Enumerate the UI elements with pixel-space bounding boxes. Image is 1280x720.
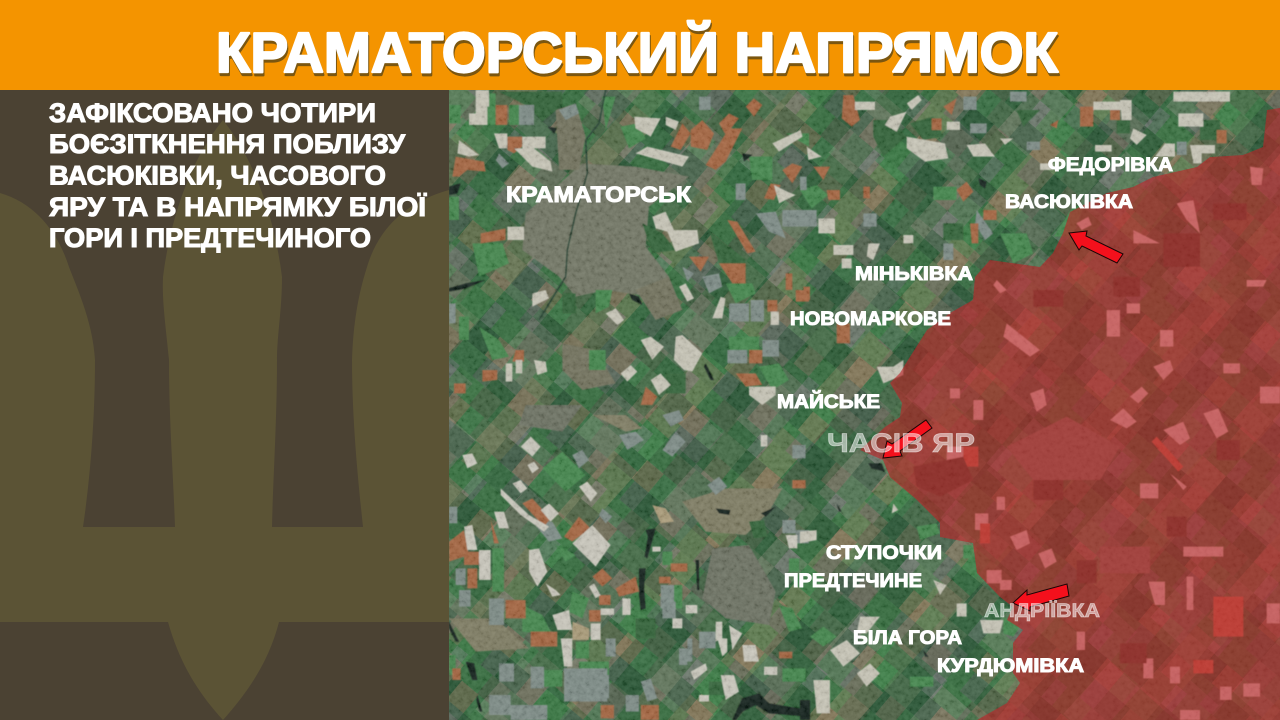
map label: Kramatorsk: КРАМАТОРСЬК — [506, 182, 692, 207]
title: КРАМАТОРСЬКИЙ НАПРЯМОК — [216, 20, 1058, 85]
map label: Novomarkove: НОВОМАРКОВЕ — [790, 309, 951, 330]
occupied territory overlay — [860, 108, 1280, 720]
arrow: Andriivka — [1013, 584, 1069, 611]
panel: left text background with trident — [0, 90, 449, 720]
text block: summary: ГОРИ І ПРЕДТЕЧИНОГО — [49, 223, 371, 253]
header bar — [0, 0, 1280, 90]
map label: Andriivka: АНДРІЇВКА — [984, 601, 1100, 622]
map area: north-east fields — [800, 92, 1267, 357]
text block: summary: ЗАФІКСОВАНО ЧОТИРИ — [49, 98, 376, 128]
text block: summary: ВАСЮКІВКИ, ЧАСОВОГО — [49, 160, 386, 190]
icon: trident watermark — [0, 120, 449, 720]
arrow: Vasiukivka — [1069, 231, 1123, 263]
map label: Stupochky: СТУПОЧКИ — [826, 543, 942, 564]
map label: Chasiv Yar: ЧАСІВ ЯР — [827, 428, 975, 458]
map label: Fedorivka: ФЕДОРІВКА — [1048, 155, 1173, 176]
map area: south-west fields, Druzhkivka city and reservoir — [449, 405, 809, 720]
arrow: Chasiv Yar — [883, 420, 932, 458]
map label: Bila Hora: БІЛА ГОРА — [853, 628, 962, 649]
map area: south-east fields under occupied zone — [800, 360, 1280, 720]
panel: satellite map — [449, 90, 1280, 720]
map label: Vasiukivka: ВАСЮКІВКА — [1005, 192, 1133, 213]
map texture — [449, 90, 1280, 720]
map label: Minkivka: МІНЬКІВКА — [855, 264, 973, 285]
text block: summary: ЯРУ ТА В НАПРЯМКУ БІЛОЇ — [49, 192, 428, 222]
text block: summary: БОЄЗІТКНЕННЯ ПОБЛИЗУ — [49, 129, 406, 159]
map area: north-west fields and Kramatorsk city — [449, 90, 809, 405]
map label: Maiske: МАЙСЬКЕ — [777, 391, 880, 413]
text block: summary — [49, 98, 428, 253]
map label: Kurdiumivka: КУРДЮМІВКА — [937, 656, 1084, 677]
map label: Predtechyne: ПРЕДТЕЧИНЕ — [784, 571, 922, 592]
